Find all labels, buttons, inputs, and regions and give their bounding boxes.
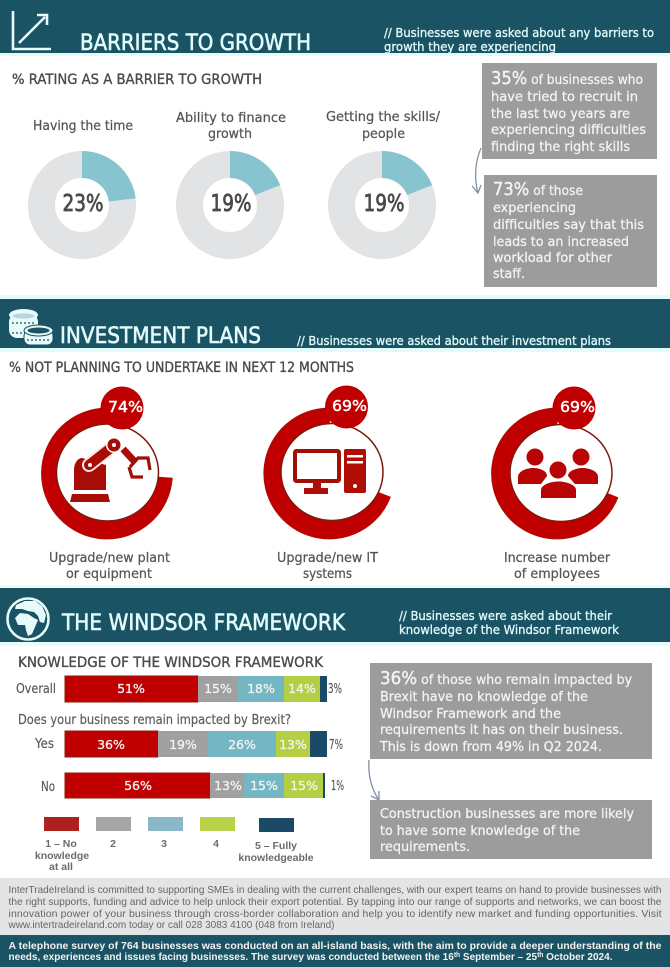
arrow: between windsor callouts [369,760,379,800]
section header band: barriers [0,0,670,56]
callout: no knowledge among impacted: Windsor Framework and the [380,706,561,722]
callout: construction businesses [370,800,652,859]
callout: recruitment difficulties: the last two years are [491,106,630,122]
section intro: windsor: // Businesses were asked about their [399,608,613,623]
stacked bar: no: 56% [124,778,152,793]
label: plant or equipment: or equipment [66,566,152,582]
footer: survey method [0,935,670,967]
donut chart: having the time [33,118,136,246]
callout: increased workload: 73% of those [493,179,583,200]
legend: knowledgeable [238,852,314,864]
callout: construction businesses: to have some knowledge of the [380,823,580,839]
callout: no knowledge among impacted: This is down from 49% in Q2 2024. [379,739,602,755]
legend [35,817,314,873]
footer: survey method: th [454,952,460,959]
footer: survey method: needs, experiences and issues facing businesses. The survey was conducted between the 16 [8,951,475,963]
radial gauge: IT systems 69% [264,386,390,539]
chart heading: knowledge: KNOWLEDGE OF THE WINDSOR FRAMEWORK [18,655,324,671]
label: plant or equipment: Upgrade/new plant [49,550,170,566]
radial gauge: plant or equipment 74% [41,386,172,539]
footer: about InterTradeIreland: www.intertradeireland.com today or call 028 3083 4100 (048 from Ireland) [8,919,334,931]
label: plant or equipment [49,550,170,582]
stacked bar: overall: 51% [117,681,145,696]
donut chart: getting the skills: 19% [364,191,404,217]
footer: survey method: th [537,952,543,959]
legend: 1 – No [45,838,77,850]
section intro: investment: // Businesses were asked about their investment plans [297,333,611,348]
stacked bar: overall: 14% [288,681,316,696]
footer: survey method: A telephone survey of 764 businesses was conducted on an all-island basis, with the aim to provide a deeper understanding of the [8,940,662,952]
title: barriers to growth: BARRIERS TO GROWTH [80,31,311,56]
stacked bar: overall: 18% [247,681,275,696]
donut chart: ability to finance growth: growth [208,126,252,142]
stacked bar: no: 1% [331,779,344,794]
callout: increased workload [484,175,657,287]
donut chart: getting the skills [326,109,440,246]
chart heading: rating as a barrier: % RATING AS A BARRIER TO GROWTH [12,72,262,88]
arrow: between callouts [472,148,481,193]
footer: about InterTradeIreland [0,878,670,935]
footer: survey method: October 2024. [543,951,613,963]
question: impacted by Brexit: Does your business remain impacted by Brexit? [18,713,291,728]
icon: desktop computer [295,449,366,494]
radial gauge: IT systems 69%: 69% [332,397,367,415]
donut chart: having the time: 23% [62,191,104,217]
stacked bar: yes: Yes [34,737,54,752]
callout: increased workload: difficulties say that this [493,217,644,233]
callout: no knowledge among impacted [370,663,652,759]
section intro: barriers: growth they are experiencing [384,39,556,54]
donut chart: ability to finance growth [176,110,286,246]
footer: about InterTradeIreland: the right supports, funding and advice to help unlock their export potential. By tapping into our range of supports and networks, we can boost the [8,896,662,908]
callout: recruitment difficulties: finding the right skills [491,139,630,155]
radial gauge: employees 69%: 69% [560,398,595,416]
callout: construction businesses: Construction businesses are more likely [380,806,634,822]
callout: increased workload: workload for other [493,250,612,266]
stacked bar: yes: 26% [228,737,256,752]
section intro: barriers: // Businesses were asked about any barriers to [384,25,654,40]
section header band: investment [0,295,670,352]
stacked bar: overall: 15% [204,681,232,696]
legend: knowledge [35,850,89,862]
callout: increased workload: experiencing [493,200,576,216]
callout: recruitment difficulties: 35% of businesses who [491,68,643,89]
footer: survey method: September – 25 [460,951,537,963]
section intro: windsor: knowledge of the Windsor Framework [399,622,620,637]
title: the windsor framework: THE WINDSOR FRAMEWORK [61,611,346,636]
panel: barriers to growth [0,0,670,287]
footer: about InterTradeIreland: innovation power of your business through cross-border collaboration and help you to identify new market and funding opportunities. Visit [8,908,662,920]
label: IT systems: Upgrade/new IT [277,550,379,566]
callout: recruitment difficulties [482,63,657,159]
callout: recruitment difficulties: experiencing difficulties [491,122,646,138]
stacked bar: overall [16,676,342,702]
stacked bar: yes: 36% [97,737,125,752]
chart heading: not planning to undertake: % NOT PLANNING TO UNDERTAKE IN NEXT 12 MONTHS [9,360,354,376]
callout: no knowledge among impacted: requirements it has on their business. [380,722,623,738]
section intro: barriers [384,25,654,54]
icon: growth chart arrow [13,11,51,49]
legend: 5 – Fully [255,840,297,852]
donut chart: getting the skills: Getting the skills/ [326,109,440,125]
icon: robot arm [70,437,150,502]
stacked bar: yes [34,731,343,757]
donut chart: ability to finance growth: Ability to finance [176,110,286,126]
callout: recruitment difficulties: have tried to recruit in [491,89,638,105]
icon: coins [9,309,53,345]
stacked bar: no [41,773,344,798]
stacked bar: no: 15% [290,778,318,793]
label: employees: of employees [514,566,600,582]
stacked bar: overall: Overall [16,682,56,697]
donut chart: having the time: Having the time [33,118,133,134]
stacked bar: no: No [41,780,55,795]
legend: 2 [110,838,116,850]
title: investment plans: INVESTMENT PLANS [60,324,261,349]
legend: at all [49,861,73,873]
label: IT systems [277,550,379,582]
section header band: windsor [0,585,670,646]
stacked bar: yes: 13% [279,737,307,752]
stacked bar: yes: 7% [329,738,343,753]
label: employees: Increase number [504,550,610,566]
label: IT systems: systems [303,566,352,582]
callout: construction businesses: requirements. [380,839,470,855]
stacked bar: overall: 3% [328,682,342,697]
stacked bar: no: 13% [214,778,242,793]
panel: investment plans [0,295,670,582]
legend: 4 [213,838,219,850]
stacked bar: no: 15% [250,778,278,793]
radial gauge: plant or equipment 74%: 74% [108,398,143,416]
callout: increased workload: staff. [493,266,525,282]
callout: no knowledge among impacted: 36% of those who remain impacted by [380,668,632,689]
icon: group of people [518,448,598,498]
panel: the windsor framework [0,585,670,873]
legend: 3 [161,838,167,850]
donut chart: ability to finance growth: 19% [210,191,252,217]
stacked bar: yes: 19% [169,737,197,752]
icon: globe [8,598,48,640]
section intro: windsor [399,608,620,637]
donut chart: getting the skills: people [362,126,405,142]
callout: increased workload: leads to an increased [493,234,629,250]
callout: no knowledge among impacted: Brexit have no knowledge of the [380,689,588,705]
radial gauge: employees 69% [491,386,618,539]
label: employees [504,550,610,582]
